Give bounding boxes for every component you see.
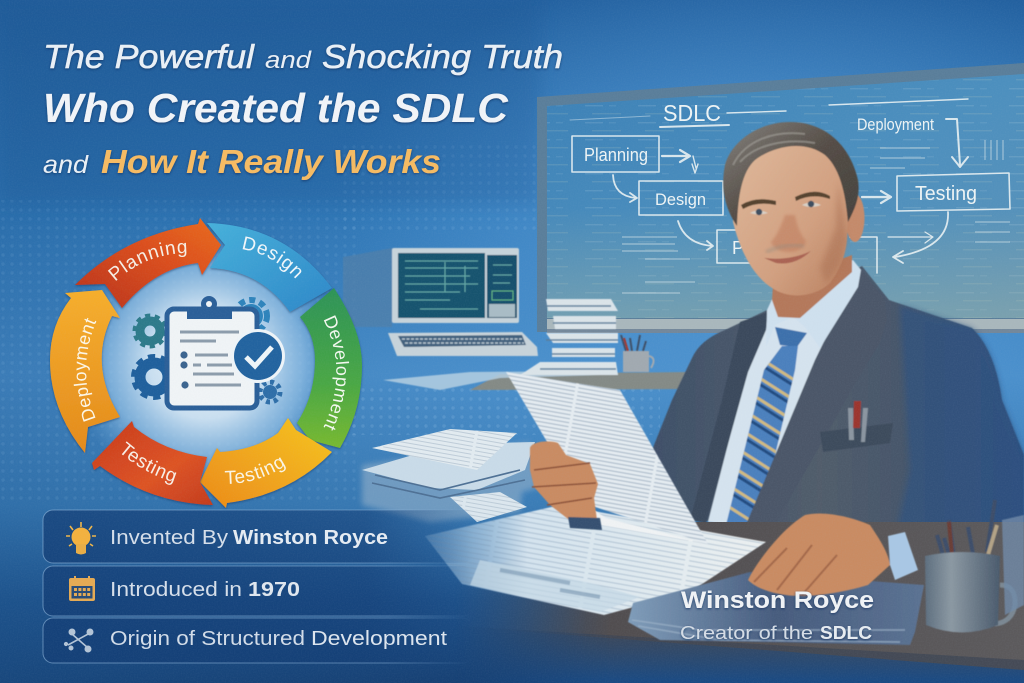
cycle arrow: Testing red: Testing xyxy=(122,441,176,485)
chalkboard with SDLC diagram xyxy=(537,63,1024,333)
chalkboard with SDLC diagram: SDLC xyxy=(663,100,721,126)
chalkboard with SDLC diagram: P xyxy=(732,238,744,258)
paper stack on left of desk xyxy=(362,429,537,522)
hand holding document xyxy=(530,441,602,530)
panel: invented by: Invented By xyxy=(110,527,228,549)
right sleeve shade xyxy=(895,305,1024,575)
cycle arrow: Testing yellow xyxy=(200,418,332,509)
breast pocket with pens xyxy=(820,401,893,452)
title: How It Really Works xyxy=(101,143,441,180)
cheek shading xyxy=(820,180,847,284)
name caption xyxy=(680,587,874,643)
panel: introduced: 1970 xyxy=(248,579,300,601)
panel: origin xyxy=(43,618,473,663)
info panels xyxy=(43,510,473,663)
neck xyxy=(772,255,852,318)
face xyxy=(733,143,847,295)
panel: invented by: Winston Royce xyxy=(233,527,388,549)
ear xyxy=(846,194,864,242)
shirt front xyxy=(708,270,860,527)
cycle arrow: Development: Development xyxy=(324,315,350,431)
panel: origin: Origin of Structured xyxy=(110,628,305,650)
title: The Powerful xyxy=(43,38,256,75)
title: Shocking Truth xyxy=(322,38,563,75)
big paper on desk xyxy=(425,505,766,615)
tie xyxy=(726,326,808,522)
eyes xyxy=(750,202,821,214)
shelf with books and mug xyxy=(383,299,690,390)
eyebrows xyxy=(741,192,830,209)
cycle arrow: Deployment xyxy=(48,290,121,454)
chalkboard with SDLC diagram: Testing xyxy=(915,183,977,205)
desk xyxy=(440,522,1024,683)
mouth xyxy=(764,251,811,264)
right hand resting on papers xyxy=(748,513,918,596)
panel: introduced: Introduced in xyxy=(110,579,242,601)
cycle arrow: Deployment: Deployment xyxy=(74,318,96,422)
icon: light bulb xyxy=(66,522,96,554)
chalkboard with SDLC diagram: Design xyxy=(655,190,706,209)
chalkboard with SDLC diagram: Deployment xyxy=(857,115,934,134)
cycle arrow: Design xyxy=(207,223,332,314)
retro computer terminal xyxy=(343,248,538,356)
title: Who Created the SDLC xyxy=(43,85,509,131)
cycle arrow: Planning xyxy=(75,218,222,310)
center icon: clipboard with gears and checkmark xyxy=(134,296,285,408)
cycle arrow: Planning: Planning xyxy=(108,242,186,281)
nose xyxy=(771,215,806,252)
name caption: Winston Royce xyxy=(681,587,874,614)
panel: introduced xyxy=(43,566,473,616)
lapels xyxy=(690,312,768,523)
man in suit xyxy=(652,122,1024,522)
collar xyxy=(766,260,861,348)
panel: invented by xyxy=(43,510,473,563)
hair xyxy=(723,122,859,226)
title: and xyxy=(265,47,312,74)
icon: calendar xyxy=(69,576,95,601)
cycle arrow: Development xyxy=(296,288,364,450)
name caption: SDLC xyxy=(820,623,872,643)
title xyxy=(43,38,563,180)
name caption: Creator of the xyxy=(680,623,813,643)
mug with pens xyxy=(925,500,1024,632)
cycle arrow: Testing yellow: Testing xyxy=(224,457,286,484)
cycle arrow: Design: Design xyxy=(242,236,302,278)
cycle arrow: Testing red xyxy=(92,421,213,507)
SDLC cycle diagram xyxy=(48,218,364,509)
suit jacket xyxy=(652,266,1024,540)
held document xyxy=(506,372,708,544)
panel: origin: Development xyxy=(311,628,448,650)
paper stack under caption xyxy=(628,572,924,645)
icon: network nodes xyxy=(64,629,93,652)
chalkboard with SDLC diagram: Planning xyxy=(584,145,648,165)
title: and xyxy=(43,151,89,179)
